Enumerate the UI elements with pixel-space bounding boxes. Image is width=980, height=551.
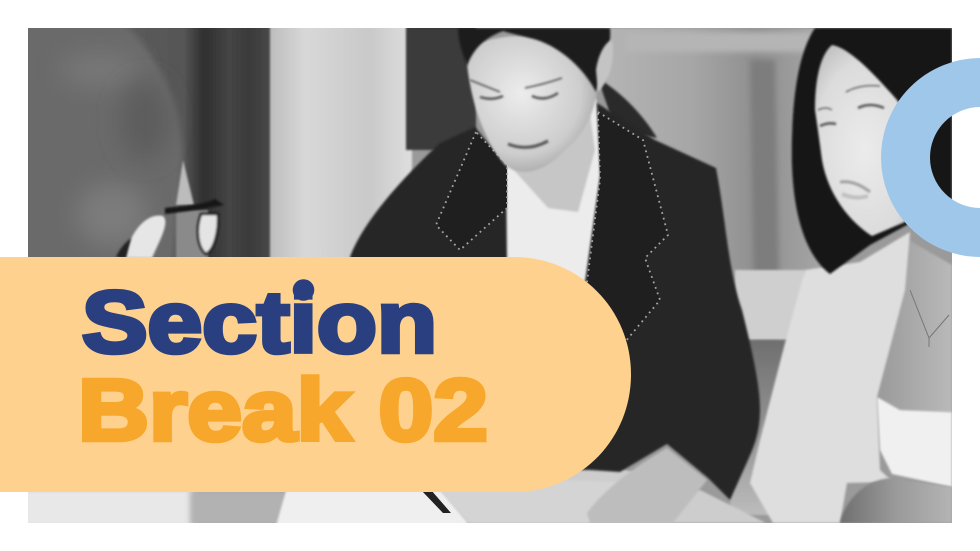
title xyxy=(78,274,488,459)
room: floor xyxy=(730,338,786,516)
room: wood panel grooves xyxy=(750,59,780,270)
room: white curtain xyxy=(270,20,412,270)
right woman shirt xyxy=(750,232,910,523)
right woman white top xyxy=(877,397,952,487)
decorative ring xyxy=(906,82,980,232)
central woman hair xyxy=(458,28,610,92)
central woman neck xyxy=(505,115,595,212)
right woman arm xyxy=(840,478,952,523)
title line: Section: Section xyxy=(82,274,437,371)
title line: Break 02: Break 02 xyxy=(78,362,488,459)
room: wood panel moulding xyxy=(625,32,815,52)
table and paper xyxy=(187,469,765,523)
central woman face xyxy=(466,36,598,172)
hand xyxy=(587,448,707,523)
man's head xyxy=(28,28,183,257)
man's ear and glasses xyxy=(116,160,224,260)
room: pale wall behind arm xyxy=(735,270,805,340)
central woman facial features xyxy=(470,78,562,147)
right woman necklace xyxy=(910,290,949,347)
room: dark curtain centre xyxy=(406,20,476,150)
lower left foreground blur xyxy=(28,492,195,523)
central woman ear xyxy=(596,40,613,92)
right woman face xyxy=(813,44,906,238)
i dot on Section xyxy=(293,279,314,301)
room: dark curtain left xyxy=(124,28,271,257)
central woman ponytail xyxy=(598,78,657,138)
right woman hair xyxy=(792,28,952,274)
central woman blazer xyxy=(350,103,760,500)
right woman chest xyxy=(898,242,952,412)
central woman lapels xyxy=(436,112,668,342)
room: wooden panel xyxy=(606,28,820,268)
banner panel xyxy=(0,257,631,492)
central woman shirt xyxy=(505,98,600,282)
right woman facial features xyxy=(818,86,884,198)
